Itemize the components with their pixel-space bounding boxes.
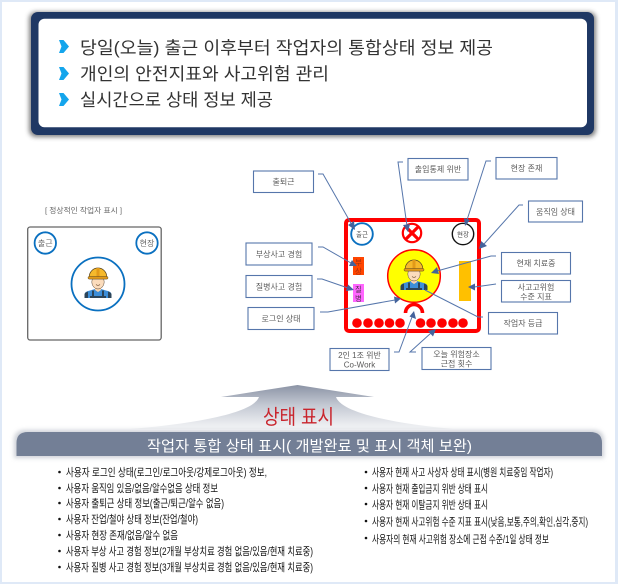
arrow: 현재 치료중 bbox=[431, 256, 496, 274]
banner: 작업자 통합 상태 표시 bbox=[14, 430, 604, 458]
big up arrow bbox=[130, 385, 453, 429]
label: 사고고위험 수준 지표: 사고고위험 bbox=[518, 283, 554, 292]
list: left column bbox=[58, 466, 313, 574]
icon: chevron 1 bbox=[59, 40, 69, 53]
label: 사고고위험 수준 지표 bbox=[502, 280, 570, 302]
panel: annotated worker card bbox=[346, 220, 479, 331]
line: 작업자 등급 bbox=[425, 290, 483, 317]
item: 사용자 질병 사고 경험 정보(3개월 부상치료 경험 없음/있음/현재 치료중) bbox=[66, 561, 313, 574]
label: 현재 치료중: 현재 치료중 bbox=[516, 259, 556, 268]
tag: 질병: 병 bbox=[355, 294, 362, 303]
icon: worker in circle bbox=[72, 258, 124, 310]
icon: co-work arc bbox=[406, 304, 422, 313]
worker card bbox=[28, 227, 161, 340]
icon: worker in yellow circle bbox=[388, 250, 440, 302]
banner: 작업자 통합 상태 표시: 작업자 통합 상태 표시( 개발완료 및 표시 객체 보완) bbox=[147, 438, 472, 455]
label: 2인 1조 위반 Co-Work: Co-Work bbox=[344, 360, 376, 370]
label: 2인 1조 위반 Co-Work: 2인 1조 위반 bbox=[338, 350, 382, 360]
badge: 현장 black: 현장 bbox=[457, 230, 469, 238]
arrow: 출퇴근 bbox=[318, 174, 355, 230]
tag: 부상: 상 bbox=[355, 266, 362, 276]
label: 출입통제 위반: 출입통제 위반 bbox=[415, 164, 462, 174]
caption: [ 정상적인 작업자 표시 ] bbox=[45, 205, 122, 215]
summary line 1: 당일(오늘) 출근 이후부터 작업자의 통합상태 정보 제공 bbox=[80, 38, 493, 58]
label: 현재 치료중 bbox=[502, 252, 570, 274]
icon: chevron 3 bbox=[59, 93, 69, 106]
arrow: 질병사고 bbox=[317, 279, 354, 291]
panel: summary bbox=[29, 12, 596, 137]
label: 움직임 상태 bbox=[528, 201, 582, 222]
arrow: 부상사고 bbox=[318, 247, 357, 266]
item: 사용자 부상 사고 경험 정보(2개월 부상치료 경험 없음/있음/현재 치료중) bbox=[66, 545, 313, 558]
arrow: 현장 존재 bbox=[464, 161, 491, 226]
item: 사용자 출퇴근 상태 정보(출근/퇴근/알수 없음) bbox=[66, 496, 224, 510]
label: 현장 존재 bbox=[496, 158, 557, 179]
label: 질병사고 경험: 질병사고 경험 bbox=[256, 282, 302, 292]
label: 부상사고 경험: 부상사고 경험 bbox=[256, 249, 302, 259]
label: 작업자 등급: 작업자 등급 bbox=[503, 318, 543, 328]
icon: chevron 2 bbox=[59, 67, 69, 80]
item: 사용자 현재 이탈금지 위반 상태 표시 bbox=[372, 498, 488, 512]
label: 오늘 위험장소 근접 횟수: 근접 횟수 bbox=[441, 358, 472, 368]
arrow: 오늘 위험장소 bbox=[410, 329, 436, 352]
icon: no-entry X bbox=[403, 224, 421, 242]
tag: 부상 bbox=[353, 257, 364, 276]
item: 사용자 잔업/철야 상태 정보(잔업/철야) bbox=[66, 513, 198, 526]
badge: 현장: 현장 bbox=[140, 238, 155, 248]
arrow: 2인 1조 위반 bbox=[394, 311, 416, 352]
item: 사용자 움직임 있음/없음/알수없음 상태 정보 bbox=[66, 481, 218, 495]
label: 부상사고 경험 bbox=[246, 243, 312, 265]
list: right column bbox=[365, 466, 588, 546]
label: 질병사고 경험 bbox=[246, 276, 312, 298]
arrow: 출입통제 위반 bbox=[398, 162, 410, 232]
label: 오늘 위험장소 근접 횟수 bbox=[422, 348, 491, 370]
label: 오늘 위험장소 근접 횟수: 오늘 위험장소 bbox=[433, 349, 480, 359]
risk level bar bbox=[459, 261, 471, 301]
item: 사용자 로그인 상태(로그인/로그아웃/강제로그아웃) 정보, bbox=[66, 466, 267, 479]
label: 작업자 등급 bbox=[488, 312, 558, 334]
item: 사용자의 현재 사고위험 장소에 근접 수준/1일 상태 정보 bbox=[372, 532, 549, 546]
item: 사용자 현재 출입금지 위반 상태 표시 bbox=[372, 482, 488, 496]
tag: 질병: 질 bbox=[355, 285, 362, 294]
tag: 질병 bbox=[353, 284, 364, 303]
label: 로그인 상태: 로그인 상태 bbox=[261, 314, 301, 324]
label: 출퇴근 bbox=[254, 171, 314, 192]
danger proximity dots bbox=[352, 318, 468, 328]
label: 사고고위험 수준 지표: 수준 지표 bbox=[520, 292, 552, 302]
label: 2인 1조 위반 Co-Work bbox=[330, 348, 389, 370]
heading: 상태 표시: 상태 표시 bbox=[263, 406, 334, 429]
arrow: 로그인 상태 bbox=[320, 296, 401, 312]
label: 출입통제 위반 bbox=[408, 158, 468, 180]
arrow: 사고고위험 bbox=[468, 284, 496, 290]
label: 현장 존재: 현장 존재 bbox=[511, 163, 542, 173]
label: 로그인 상태 bbox=[248, 308, 314, 330]
summary line 2: 개인의 안전지표와 사고위험 관리 bbox=[80, 64, 329, 84]
arrow: 움직임 상태 bbox=[479, 205, 523, 249]
label: 움직임 상태: 움직임 상태 bbox=[536, 206, 575, 216]
badge: 출근: 출근 bbox=[38, 238, 53, 248]
summary line 3: 실시간으로 상태 정보 제공 bbox=[80, 90, 273, 110]
tag: 부상: 부 bbox=[355, 258, 362, 267]
item: 사용자 현장 존재/없음/알수 없음 bbox=[66, 528, 178, 542]
panel: normal worker display bbox=[28, 205, 161, 340]
badge: 출근: 출근 bbox=[356, 230, 368, 238]
label: 출퇴근: 출퇴근 bbox=[272, 176, 295, 186]
